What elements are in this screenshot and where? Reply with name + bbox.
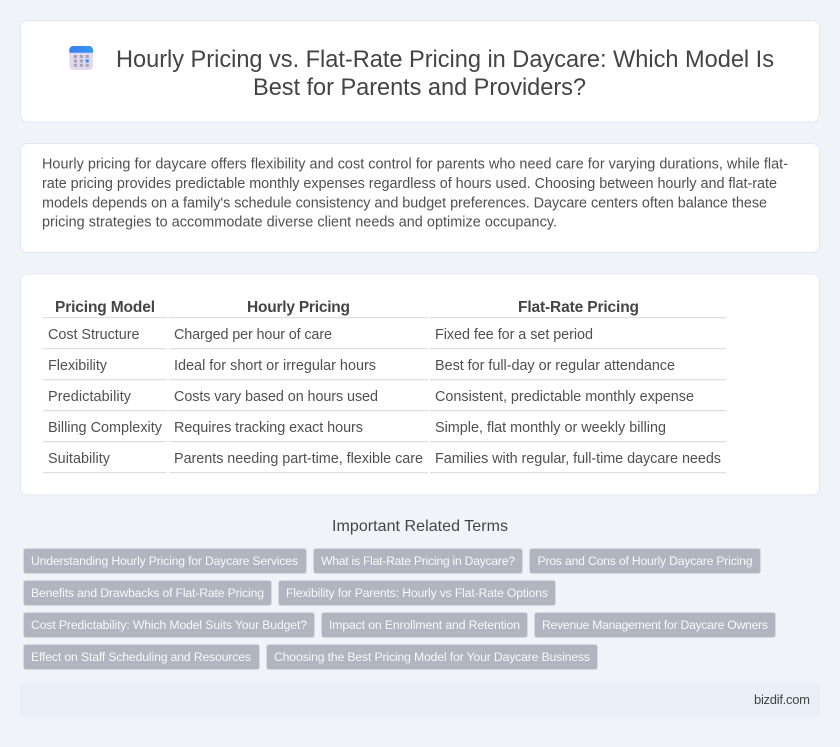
table row: predictability xyxy=(48,389,694,405)
chip xyxy=(278,580,556,606)
table row: cost structure xyxy=(48,327,593,343)
table row: flexibility xyxy=(48,358,675,374)
chip: Pros and Cons of Hourly Daycare Pricing xyxy=(538,554,752,568)
table row: billing complexity xyxy=(48,420,666,436)
table row: billing complexity: Billing Complexity xyxy=(48,420,163,436)
table row: cost structure: Cost Structure xyxy=(48,327,140,343)
chip: Benefits and Drawbacks of Flat-Rate Pricing xyxy=(31,586,264,600)
table row: cost structure: Charged per hour of care xyxy=(174,327,332,343)
table header row: Pricing Model xyxy=(55,299,155,316)
chip: Effect on Staff Scheduling and Resources xyxy=(31,650,251,664)
table row: suitability: Families with regular, full-time daycare needs xyxy=(435,451,721,467)
chip xyxy=(24,644,260,670)
text block: summary: rate pricing provides predictable monthly expenses regardless of hours used. Choosing between hourly and flat-rate xyxy=(42,176,777,192)
text block: summary: pricing strategies to accommodate diverse client needs and optimize occupancy. xyxy=(42,214,557,230)
chip: Cost Predictability: Which Model Suits Your Budget? xyxy=(31,618,307,632)
chip xyxy=(534,612,776,638)
heading: title: Hourly Pricing vs. Flat-Rate Pricing in Daycare: Which Model Is xyxy=(116,47,774,73)
panel: comparison table xyxy=(20,274,820,495)
table row: suitability: Parents needing part-time, flexible care xyxy=(174,451,423,467)
table row: flexibility: Ideal for short or irregular hours xyxy=(174,358,376,374)
heading: title: Best for Parents and Providers? xyxy=(253,75,586,101)
table header row xyxy=(55,299,639,316)
icon: calendar xyxy=(69,46,93,70)
chip: Revenue Management for Daycare Owners xyxy=(542,618,768,632)
related terms chips xyxy=(24,548,776,670)
text block: summary xyxy=(42,156,788,230)
text block: summary: Hourly pricing for daycare offers flexibility and cost control for parents who need care for varying durations, while flat- xyxy=(42,156,788,172)
table row: cost structure: Fixed fee for a set period xyxy=(435,327,593,343)
table row: flexibility: Best for full-day or regular attendance xyxy=(435,358,675,374)
panel: title card xyxy=(20,20,820,122)
chip xyxy=(314,548,522,574)
table header row: Flat-Rate Pricing xyxy=(518,299,639,316)
table row: billing complexity: Requires tracking exact hours xyxy=(174,420,363,436)
table row: predictability: Costs vary based on hours used xyxy=(174,389,378,405)
chip xyxy=(24,612,314,638)
chip xyxy=(24,548,306,574)
table header row: Hourly Pricing xyxy=(247,299,350,316)
footer bar: bizdif.com xyxy=(754,692,810,707)
chip xyxy=(322,612,528,638)
chip xyxy=(530,548,760,574)
table row: predictability: Consistent, predictable monthly expense xyxy=(435,389,694,405)
table row: predictability: Predictability xyxy=(48,389,132,405)
heading: title xyxy=(116,47,774,101)
chip: Choosing the Best Pricing Model for Your Daycare Business xyxy=(274,650,590,664)
heading: important related terms: Important Related Terms xyxy=(332,518,508,535)
chip: Impact on Enrollment and Retention xyxy=(329,618,520,632)
chip xyxy=(24,580,272,606)
text block: summary: models depends on a family's schedule consistency and budget preferences. Daycare centers often balance these xyxy=(42,196,767,212)
table row: billing complexity: Simple, flat monthly or weekly billing xyxy=(435,420,666,436)
panel: intro paragraph xyxy=(20,144,820,252)
table row: suitability: Suitability xyxy=(48,451,111,467)
chip xyxy=(266,644,598,670)
chip: What is Flat-Rate Pricing in Daycare? xyxy=(321,554,515,568)
table row: suitability xyxy=(48,451,721,467)
footer bar xyxy=(20,683,820,717)
chip: Flexibility for Parents: Hourly vs Flat-Rate Options xyxy=(286,586,548,600)
chip: Understanding Hourly Pricing for Daycare Services xyxy=(31,554,298,568)
table row: flexibility: Flexibility xyxy=(48,358,108,374)
